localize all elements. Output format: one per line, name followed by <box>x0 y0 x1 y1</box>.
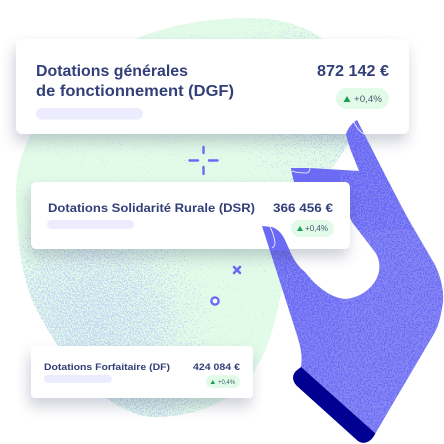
placeholder bar <box>36 108 143 120</box>
heading: DGF label: de fonctionnement (DGF) <box>36 83 234 100</box>
heading: DGF label <box>36 63 234 100</box>
label: Dotations Solidarité Rurale (DSR) <box>48 203 255 215</box>
badge: +0,4%: +0,4% <box>218 380 236 386</box>
badge: +0,4% <box>336 88 389 109</box>
amount: 424 084 € <box>193 362 240 372</box>
card: Dotations Forfaitaire <box>31 346 253 398</box>
icon: crosshair <box>190 147 218 174</box>
badge: +0,4% <box>206 375 240 388</box>
card: Dotations générales de fonctionnement <box>16 39 409 134</box>
card: Dotations Solidarité Rurale <box>31 182 350 249</box>
badge: +0,4%: +0,4% <box>354 94 383 105</box>
icon: cross <box>234 267 240 273</box>
label: Dotations Forfaitaire (DF) <box>44 362 170 372</box>
dotted texture <box>17 18 348 417</box>
amount: 366 456 € <box>273 203 334 215</box>
amount: 872 142 € <box>317 63 389 80</box>
placeholder bar <box>47 220 134 229</box>
placeholder bar <box>44 375 112 383</box>
icon: hand <box>270 120 444 443</box>
badge: +0,4%: +0,4% <box>305 224 328 233</box>
heading: DGF label: Dotations générales <box>36 63 188 80</box>
icon: ring <box>211 297 219 305</box>
green blob background <box>16 18 348 417</box>
badge: +0,4% <box>291 220 334 237</box>
